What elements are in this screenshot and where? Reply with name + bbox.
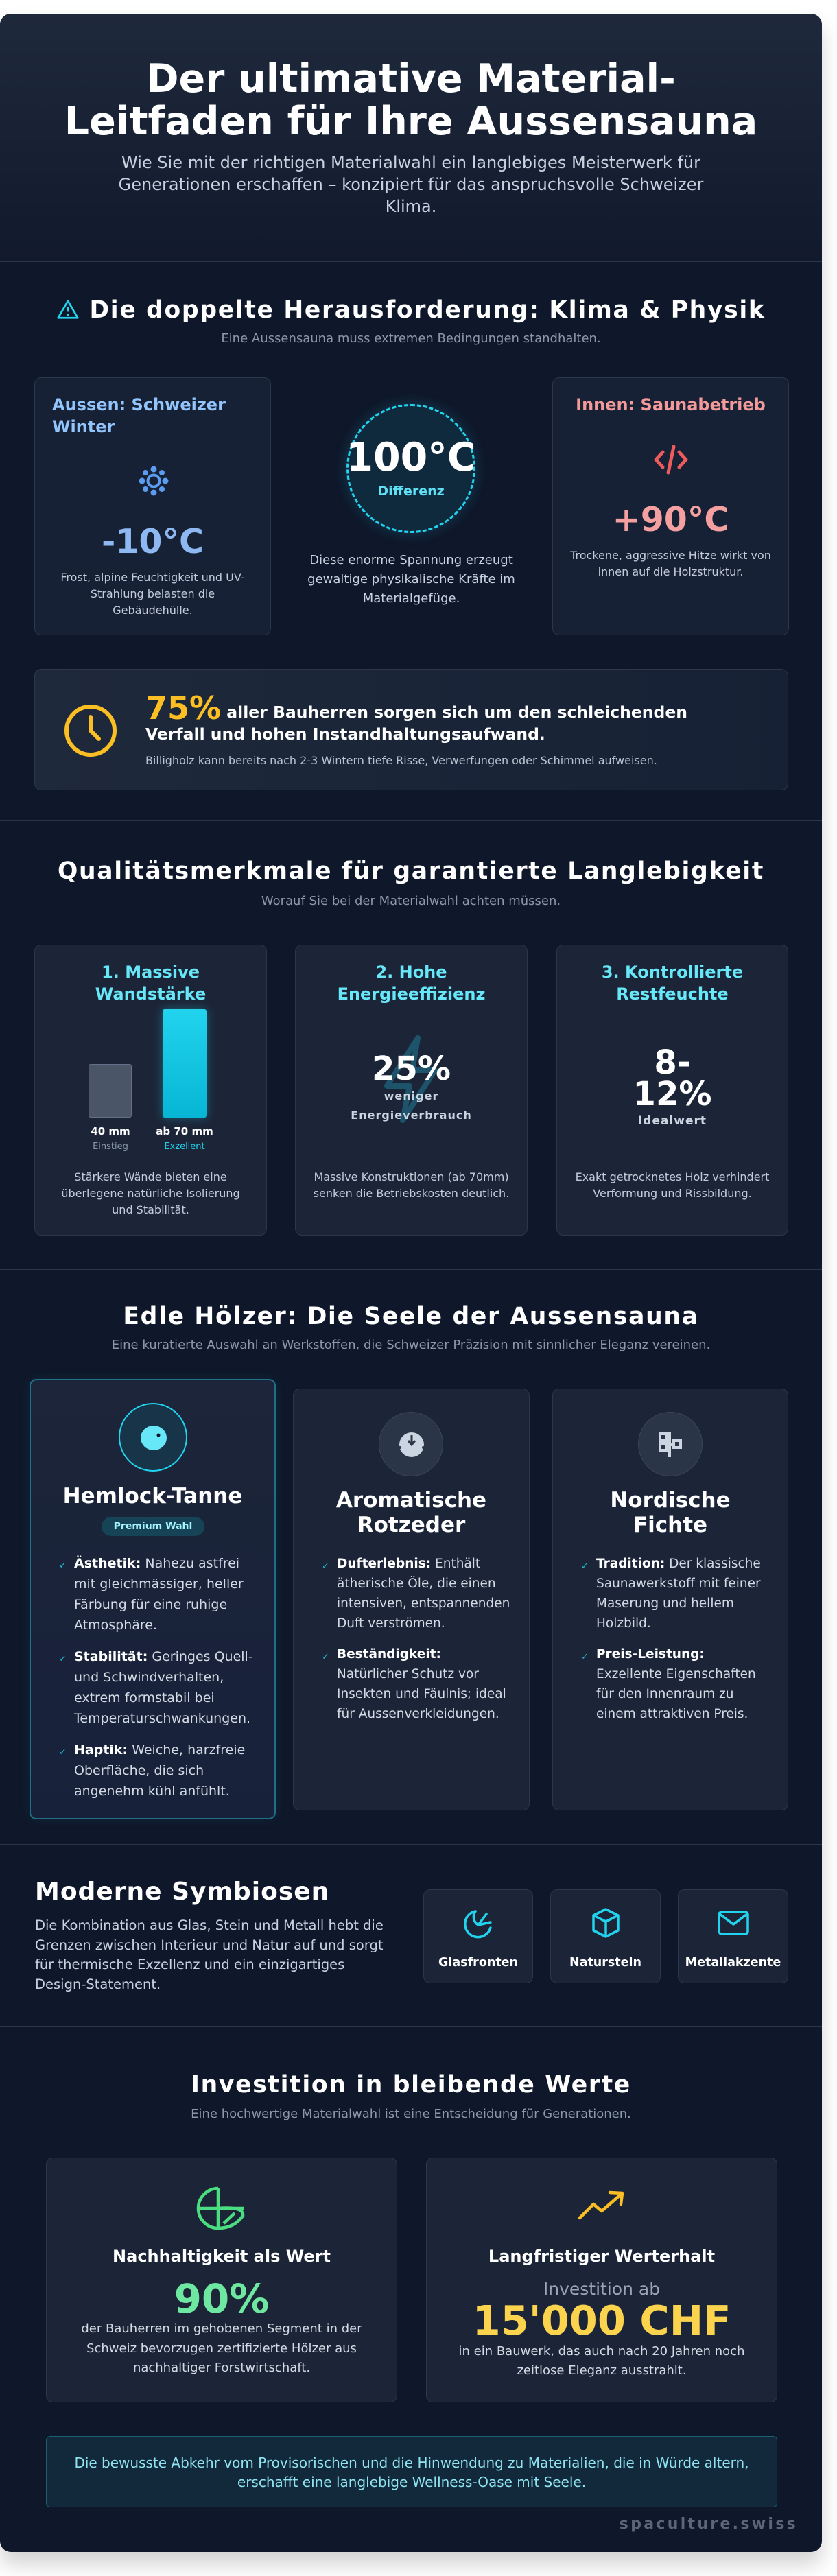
section: doppelte Herausforderung: [0, 261, 822, 820]
subheading: Eine hochwertige Materialwahl ist eine Entscheidung für Generationen.: [191, 2107, 631, 2121]
statement: [145, 689, 687, 744]
description: Exakt getrocknetes Holz verhindert Verformung und Rissbildung.: [576, 1170, 769, 1200]
value: +90°C: [613, 500, 729, 539]
icon: [379, 1412, 443, 1476]
list: Insekten und Fäulnis; ideal: [337, 1687, 506, 1701]
title: Der ultimative Material-: [146, 56, 676, 102]
list: Duft verströmen.: [337, 1616, 445, 1631]
bar chart: [89, 1004, 213, 1152]
text: spannung: Diese enorme Spannung erzeugt gewaltige physikalische Kräfte im Materialgefüge.: [307, 553, 515, 606]
panel: Nordische Fichte: [552, 1389, 788, 1810]
description: in ein Bauwerk, das auch nach 20 Jahren noch zeitlose Eleganz ausstrahlt.: [458, 2344, 744, 2378]
description: Trockene, aggressive Hitze wirkt von innen auf die Holzstruktur.: [570, 549, 771, 578]
bar chart: 40 mm: [91, 1125, 130, 1137]
subheading: Eine Aussensauna muss extremen Bedingungen standhalten.: [221, 331, 601, 346]
header: [0, 14, 822, 261]
icon: code: [654, 445, 688, 475]
section: Edle Hölzer: [0, 1269, 822, 1844]
title: 1. Massive: [102, 962, 200, 982]
statement: 75% aller Bauherren sorgen sich um den schleichenden: [145, 689, 687, 726]
text: für thermische Exzellenz und ein einzigartiges: [35, 1957, 344, 1972]
heading: Edle Hölzer: Die Seele der Aussensauna: [123, 1303, 699, 1330]
section: Investition: [0, 2026, 822, 2552]
value: 8-: [654, 1043, 691, 1082]
value: 100°C: [346, 435, 476, 480]
badge: Premium Wahl: [114, 1521, 192, 1532]
label: Idealwert: [638, 1114, 707, 1128]
label: Energieverbrauch: [351, 1109, 472, 1122]
value: [633, 1043, 711, 1113]
icon: clock: [64, 705, 117, 757]
list: einem attraktiven Preis.: [596, 1707, 748, 1721]
list: Natürlicher Schutz vor: [337, 1667, 479, 1681]
list: ätherische Öle, die einen: [337, 1576, 496, 1591]
tile: Metallakzente: Metallakzente: [685, 1956, 781, 1970]
tile: Glasfronten: Glasfronten: [438, 1956, 518, 1970]
title: [336, 1488, 486, 1537]
title: Energieeffizienz: [338, 984, 485, 1004]
footer brand: spaculture.swiss: [620, 2516, 798, 2533]
title: Leitfaden für Ihre Aussensauna: [64, 99, 757, 144]
bar: 40mm: [89, 1064, 132, 1118]
panel: Restfeuchte: [556, 945, 788, 1236]
title: Hemlock-Tanne: [63, 1484, 242, 1509]
heading: Qualitätsmerkmale für garantierte Langlebigkeit: [58, 858, 764, 885]
title: Nachhaltigkeit als Wert: [113, 2247, 331, 2266]
title: Wandstärke: [95, 984, 206, 1004]
small text: Billigholz kann bereits nach 2-3 Wintern tiefe Risse, Verwerfungen oder Schimmel aufweisen.: [145, 754, 657, 767]
panel: aussen: [34, 377, 271, 635]
bar chart: ab 70 mm: [156, 1125, 213, 1137]
tile: Glasfronten: [423, 1889, 533, 1983]
heading: Moderne Symbiosen: [35, 1878, 329, 1906]
title: [338, 962, 485, 1004]
tile: Naturstein: Naturstein: [569, 1956, 641, 1970]
title: 2. Hohe: [375, 962, 447, 982]
title: [64, 56, 757, 144]
icon: globe leaf: [196, 2187, 244, 2230]
panel: Energieeffizienz: [295, 945, 528, 1236]
list: [582, 1557, 761, 1721]
subheading: Worauf Sie bei der Materialwahl achten müssen.: [261, 894, 561, 908]
list: [323, 1557, 510, 1721]
callout: quote: erschafft eine langlebige Wellness-Oase mit Seele.: [237, 2474, 586, 2490]
panel: innen: [552, 377, 789, 635]
description: Frost, alpine Feuchtigkeit und UV-Strahlung belasten die Gebäudehülle.: [60, 571, 245, 617]
panel title: [52, 395, 226, 436]
icon: trending up: [578, 2191, 624, 2220]
heading: Investition in bleibende Werte: [191, 2071, 631, 2099]
title: 3. Kontrollierte: [602, 962, 743, 982]
subtitle: Generationen erschaffen – konzipiert für das anspruchsvolle Schweizer: [119, 175, 703, 194]
label: Differenz: [377, 484, 445, 499]
list: für Aussenverkleidungen.: [337, 1707, 499, 1721]
tile: Metallakzente: [678, 1889, 788, 1983]
difference circle: [346, 404, 475, 533]
text: [35, 1917, 384, 1992]
list: intensiven, entspannenden: [337, 1596, 510, 1611]
list: Stabilität: Geringes Quell- und Schwindverhalten, extrem formstabil bei Temperaturschwankungen.: [74, 1649, 253, 1726]
subtitle: Wie Sie mit der richtigen Materialwahl ein langlebiges Meisterwerk für: [121, 153, 700, 172]
title: Rotzeder: [357, 1513, 465, 1537]
subtitle: Klima.: [386, 197, 436, 216]
bar chart: Exzellent: [164, 1142, 205, 1152]
list: Ästhetik: Nahezu astfrei mit gleichmässiger, heller Färbung für eine ruhige Atmosphäre.: [74, 1556, 244, 1633]
description: Stärkere Wände bieten eine überlegene natürliche Isolierung und Stabilität.: [61, 1170, 240, 1216]
heading: Die doppelte Herausforderung: Klima & Physik: [89, 296, 766, 324]
section: Moderne Symbiosen: [0, 1844, 822, 2026]
badge: [102, 1517, 204, 1536]
tile: Naturstein: [550, 1889, 661, 1983]
callout: quote: Die bewusste Abkehr vom Provisorischen und die Hinwendung zu Materialien, die in Würde altern,: [74, 2455, 749, 2471]
value: 25%: [372, 1050, 451, 1088]
subheading: Eine kuratierte Auswahl an Werkstoffen, die Schweizer Präzision mit sinnlicher Eleganz vereinen.: [112, 1338, 710, 1352]
title: Aromatische: [336, 1488, 486, 1513]
panel title: Aussen: Schweizer: [52, 395, 226, 414]
callout: 75%: [34, 669, 788, 790]
text: Design-Statement.: [35, 1976, 161, 1992]
list: [60, 1556, 253, 1799]
list: Exzellente Eigenschaften: [596, 1667, 756, 1681]
list: Haptik: Weiche, harzfreie Oberfläche, die sich angenehm kühl anfühlt.: [74, 1742, 245, 1799]
bar chart: Einstieg: [93, 1142, 128, 1152]
icon: snow/sun: [139, 466, 169, 495]
value: -10°C: [102, 522, 204, 561]
value: 15'000 CHF: [473, 2297, 731, 2344]
description: Massive Konstruktionen (ab 70mm) senken die Betriebskosten deutlich.: [314, 1170, 509, 1200]
icon: lightning: [384, 1035, 438, 1123]
bar: 70mm: [163, 1009, 207, 1118]
list: für den Innenraum zu: [596, 1687, 733, 1701]
panel: Wandstärke: [34, 945, 267, 1236]
subtitle: [119, 153, 704, 216]
panel title: Innen: Saunabetrieb: [576, 395, 766, 414]
label: weniger: [384, 1089, 438, 1102]
list: Preis-Leistung:: [596, 1647, 705, 1662]
panel: Werterhalt: [426, 2158, 777, 2402]
list: Beständigkeit:: [337, 1647, 441, 1662]
label: [351, 1089, 472, 1122]
title: [602, 962, 743, 1004]
title: Restfeuchte: [616, 984, 729, 1004]
value: 12%: [633, 1075, 711, 1113]
title: [610, 1488, 731, 1537]
value: 90%: [174, 2276, 269, 2322]
panel: Nachhaltigkeit: [46, 2158, 397, 2402]
icon: [638, 1412, 703, 1476]
icon: circle: [119, 1403, 187, 1472]
description: der Bauherren im gehobenen Segment in der Schweiz bevorzugen zertifizierte Hölzer aus nachhaltiger Forstwirtschaft.: [81, 2321, 362, 2375]
text: Die Kombination aus Glas, Stein und Metall hebt die: [35, 1917, 384, 1933]
list: Tradition: Der klassische: [596, 1557, 761, 1571]
list: Saunawerkstoff mit feiner: [596, 1576, 761, 1591]
text: Grenzen zwischen Interieur und Natur auf und sorgt: [35, 1937, 384, 1952]
section: Qualitätsmerkmale: [0, 820, 822, 1269]
panel title: Winter: [52, 417, 115, 436]
list: Holzbild.: [596, 1616, 651, 1631]
statement: Verfall und hohen Instandhaltungsaufwand.: [145, 724, 545, 744]
callout: quote: [46, 2436, 777, 2507]
list: Dufterlebnis: Enthält: [337, 1557, 480, 1571]
panel: Rotzeder: [293, 1389, 530, 1810]
title: [95, 962, 206, 1004]
title: Fichte: [633, 1513, 707, 1537]
list: Maserung und hellem: [596, 1596, 734, 1611]
panel: Hemlock-Tanne: [30, 1379, 276, 1819]
title: Langfristiger Werterhalt: [488, 2247, 715, 2266]
title: Nordische: [610, 1488, 731, 1513]
label: Investition ab: [543, 2279, 660, 2299]
